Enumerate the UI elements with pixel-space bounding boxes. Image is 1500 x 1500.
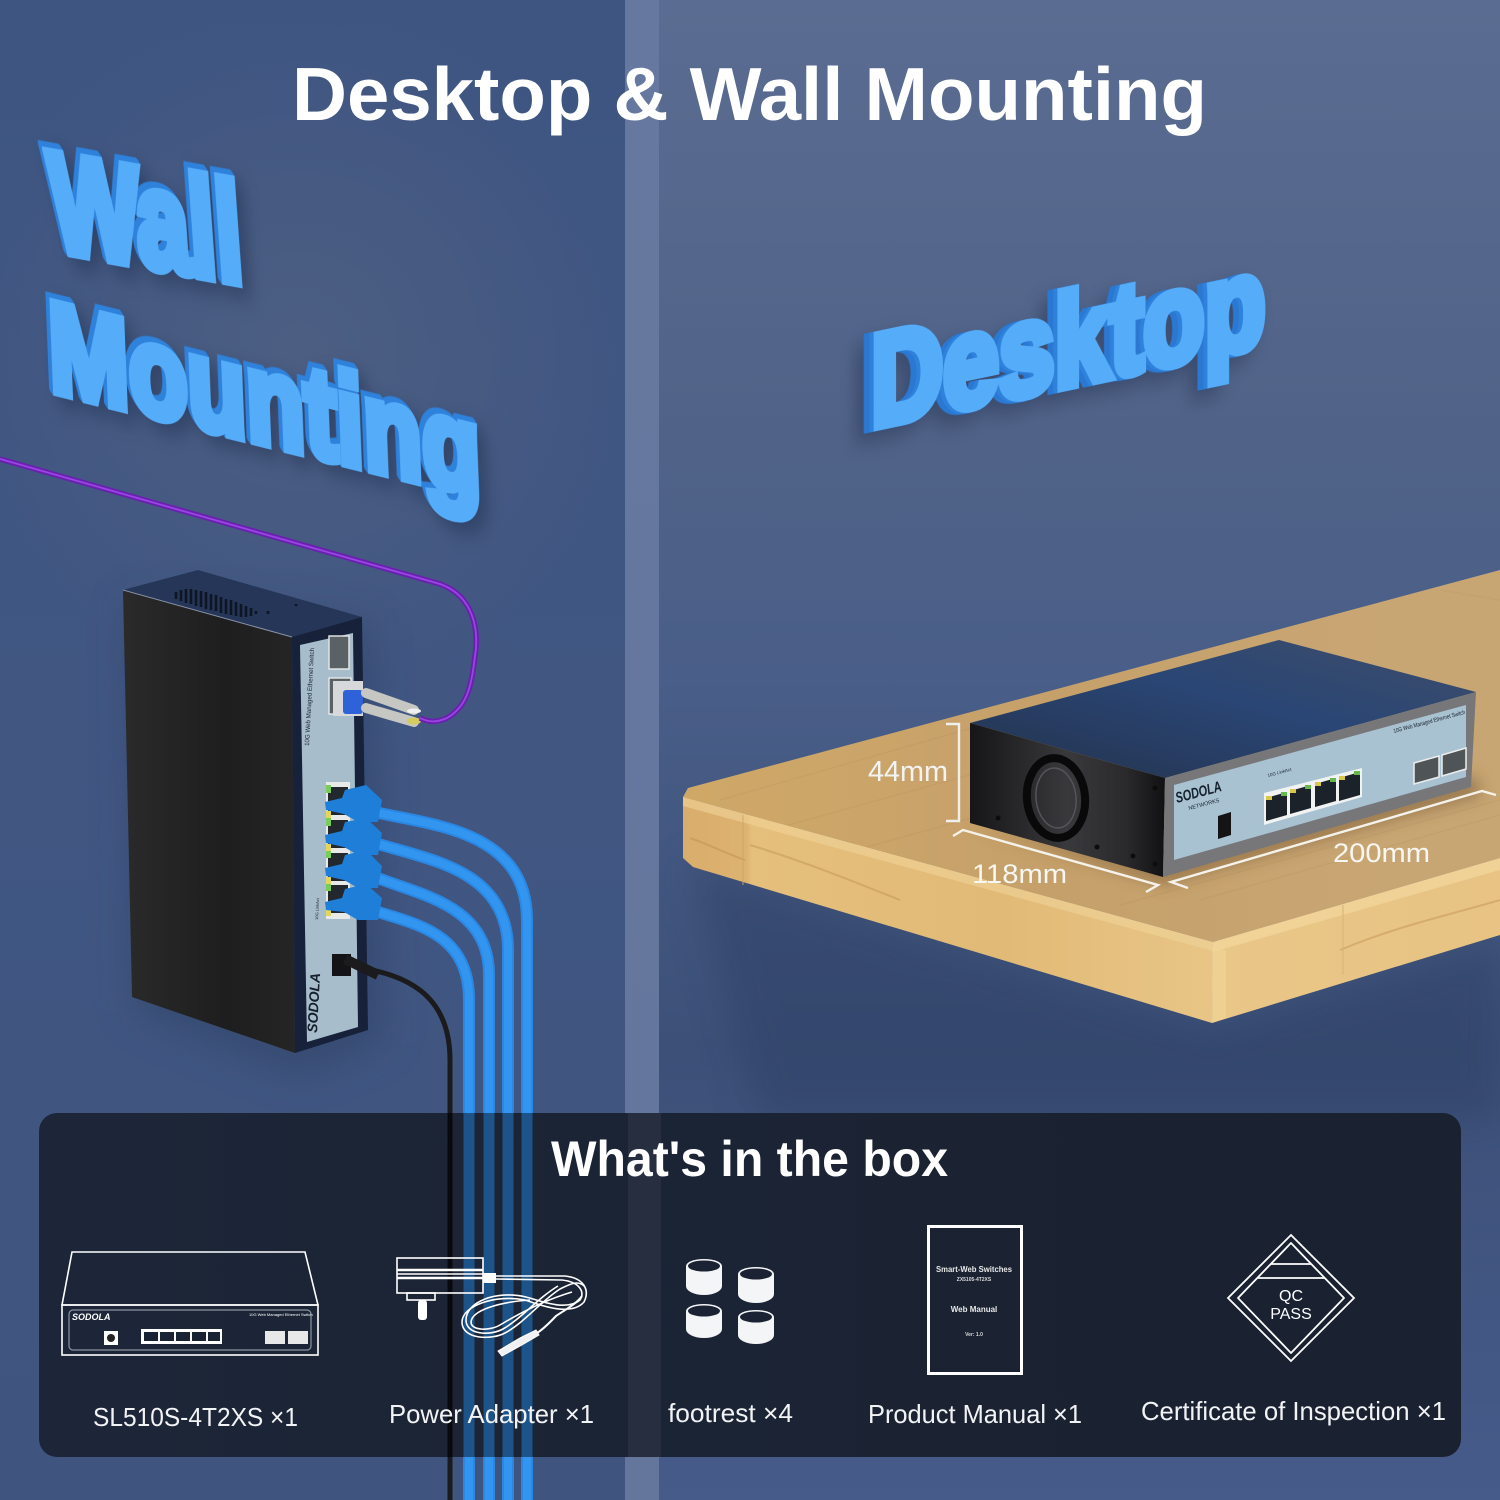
rj45 ports [1264, 768, 1362, 825]
label: switch: SL510S-4T2XS ×1 [93, 1402, 298, 1432]
table top surface [683, 570, 1500, 942]
brand logo: SODOLA [304, 972, 323, 1033]
led legend: 10G LinkAct [314, 897, 320, 920]
item: QC pass certificate [1228, 1235, 1354, 1361]
switch black side [123, 590, 295, 1053]
switch front panel [1174, 705, 1466, 860]
table front edge [683, 797, 1213, 1023]
edge highlight [123, 590, 292, 637]
item: switch line drawing [62, 1252, 318, 1355]
top grain [720, 590, 1500, 905]
fiber connector [333, 681, 421, 724]
brand logo: SODOLA [1174, 778, 1223, 807]
label: footrest: footrest ×4 [668, 1398, 793, 1428]
sfp cages [329, 636, 351, 714]
side screws [996, 786, 1158, 866]
title: Desktop & Wall Mounting [292, 52, 1207, 136]
item: switch line drawing: SODOLA [72, 1312, 111, 1322]
item: product manual: Ver: 1.0 [965, 1332, 983, 1338]
table side edge [1212, 858, 1500, 1023]
ethernet cables [375, 812, 527, 1500]
model label: 10G Web Managed Ethernet Switch [304, 648, 316, 746]
panel: desktop switch [966, 640, 1482, 884]
item: footrests [686, 1259, 774, 1344]
dimension: 44mm: 44mm [868, 756, 948, 788]
dc jack [332, 954, 351, 976]
vent slots [176, 589, 296, 617]
item: QC pass certificate: PASS [1270, 1306, 1312, 1323]
switch front bezel [1163, 692, 1476, 877]
label: power adapter: Power Adapter ×1 [389, 1399, 594, 1429]
dimension: 44mm [868, 724, 959, 821]
switch side [970, 723, 1165, 877]
dc jack [1218, 812, 1231, 839]
item: power adapter [397, 1258, 586, 1356]
dimension: 200mm [1171, 791, 1496, 888]
purple fiber cable [0, 459, 476, 721]
bevel highlights [683, 797, 1213, 951]
dimension: 200mm: 200mm [1333, 838, 1430, 868]
label: certificate: Certificate of Inspection ×1 [1141, 1396, 1446, 1426]
dimension: 118mm [953, 830, 1158, 892]
panel: wall mounted switch [123, 570, 421, 1075]
led legend: 10G LinkAct [1267, 767, 1293, 778]
switch front bezel [292, 617, 368, 1053]
item: QC pass certificate: QC [1279, 1288, 1303, 1305]
item: product manual: Smart-Web Switches [936, 1264, 1012, 1274]
network label: NETWORKS [1188, 798, 1221, 812]
rj45 ports [326, 782, 350, 919]
panel: desktop table [683, 570, 1500, 1120]
item: product manual [928, 1226, 1022, 1374]
fan vent [1023, 755, 1089, 841]
heading: What's in the box [551, 1131, 948, 1187]
ethernet plugs [325, 785, 382, 920]
wall shadow [130, 600, 385, 1075]
band seen through panel [628, 1113, 661, 1457]
3D word: Desktop: Desktop [871, 227, 1266, 456]
switch top [970, 640, 1476, 778]
sfp ports [1414, 748, 1466, 784]
3D word: Wall: Wall [44, 123, 247, 314]
wood grain on edge [690, 838, 1500, 950]
switch front panel [300, 633, 358, 1042]
item: product manual: Web Manual [951, 1305, 997, 1314]
switch contact shadow [966, 775, 1482, 884]
item: product manual: ZX5105-4T2XS [957, 1277, 992, 1283]
panel: what's in the box [39, 1113, 1461, 1457]
item: switch line drawing: 10G Web Managed Ethernet Switch [249, 1312, 313, 1317]
panel background [39, 1113, 1461, 1457]
front model label: 10G Web Managed Ethernet Switch [1393, 710, 1466, 735]
label: product manual: Product Manual ×1 [868, 1399, 1082, 1429]
power cable [345, 959, 450, 1500]
dimension: 118mm: 118mm [972, 859, 1067, 889]
cables seen through panel [450, 1113, 527, 1457]
3D word: Mounting: Mounting [46, 275, 483, 525]
switch top vent face [123, 570, 362, 637]
table shadow on wall [690, 860, 1500, 1120]
